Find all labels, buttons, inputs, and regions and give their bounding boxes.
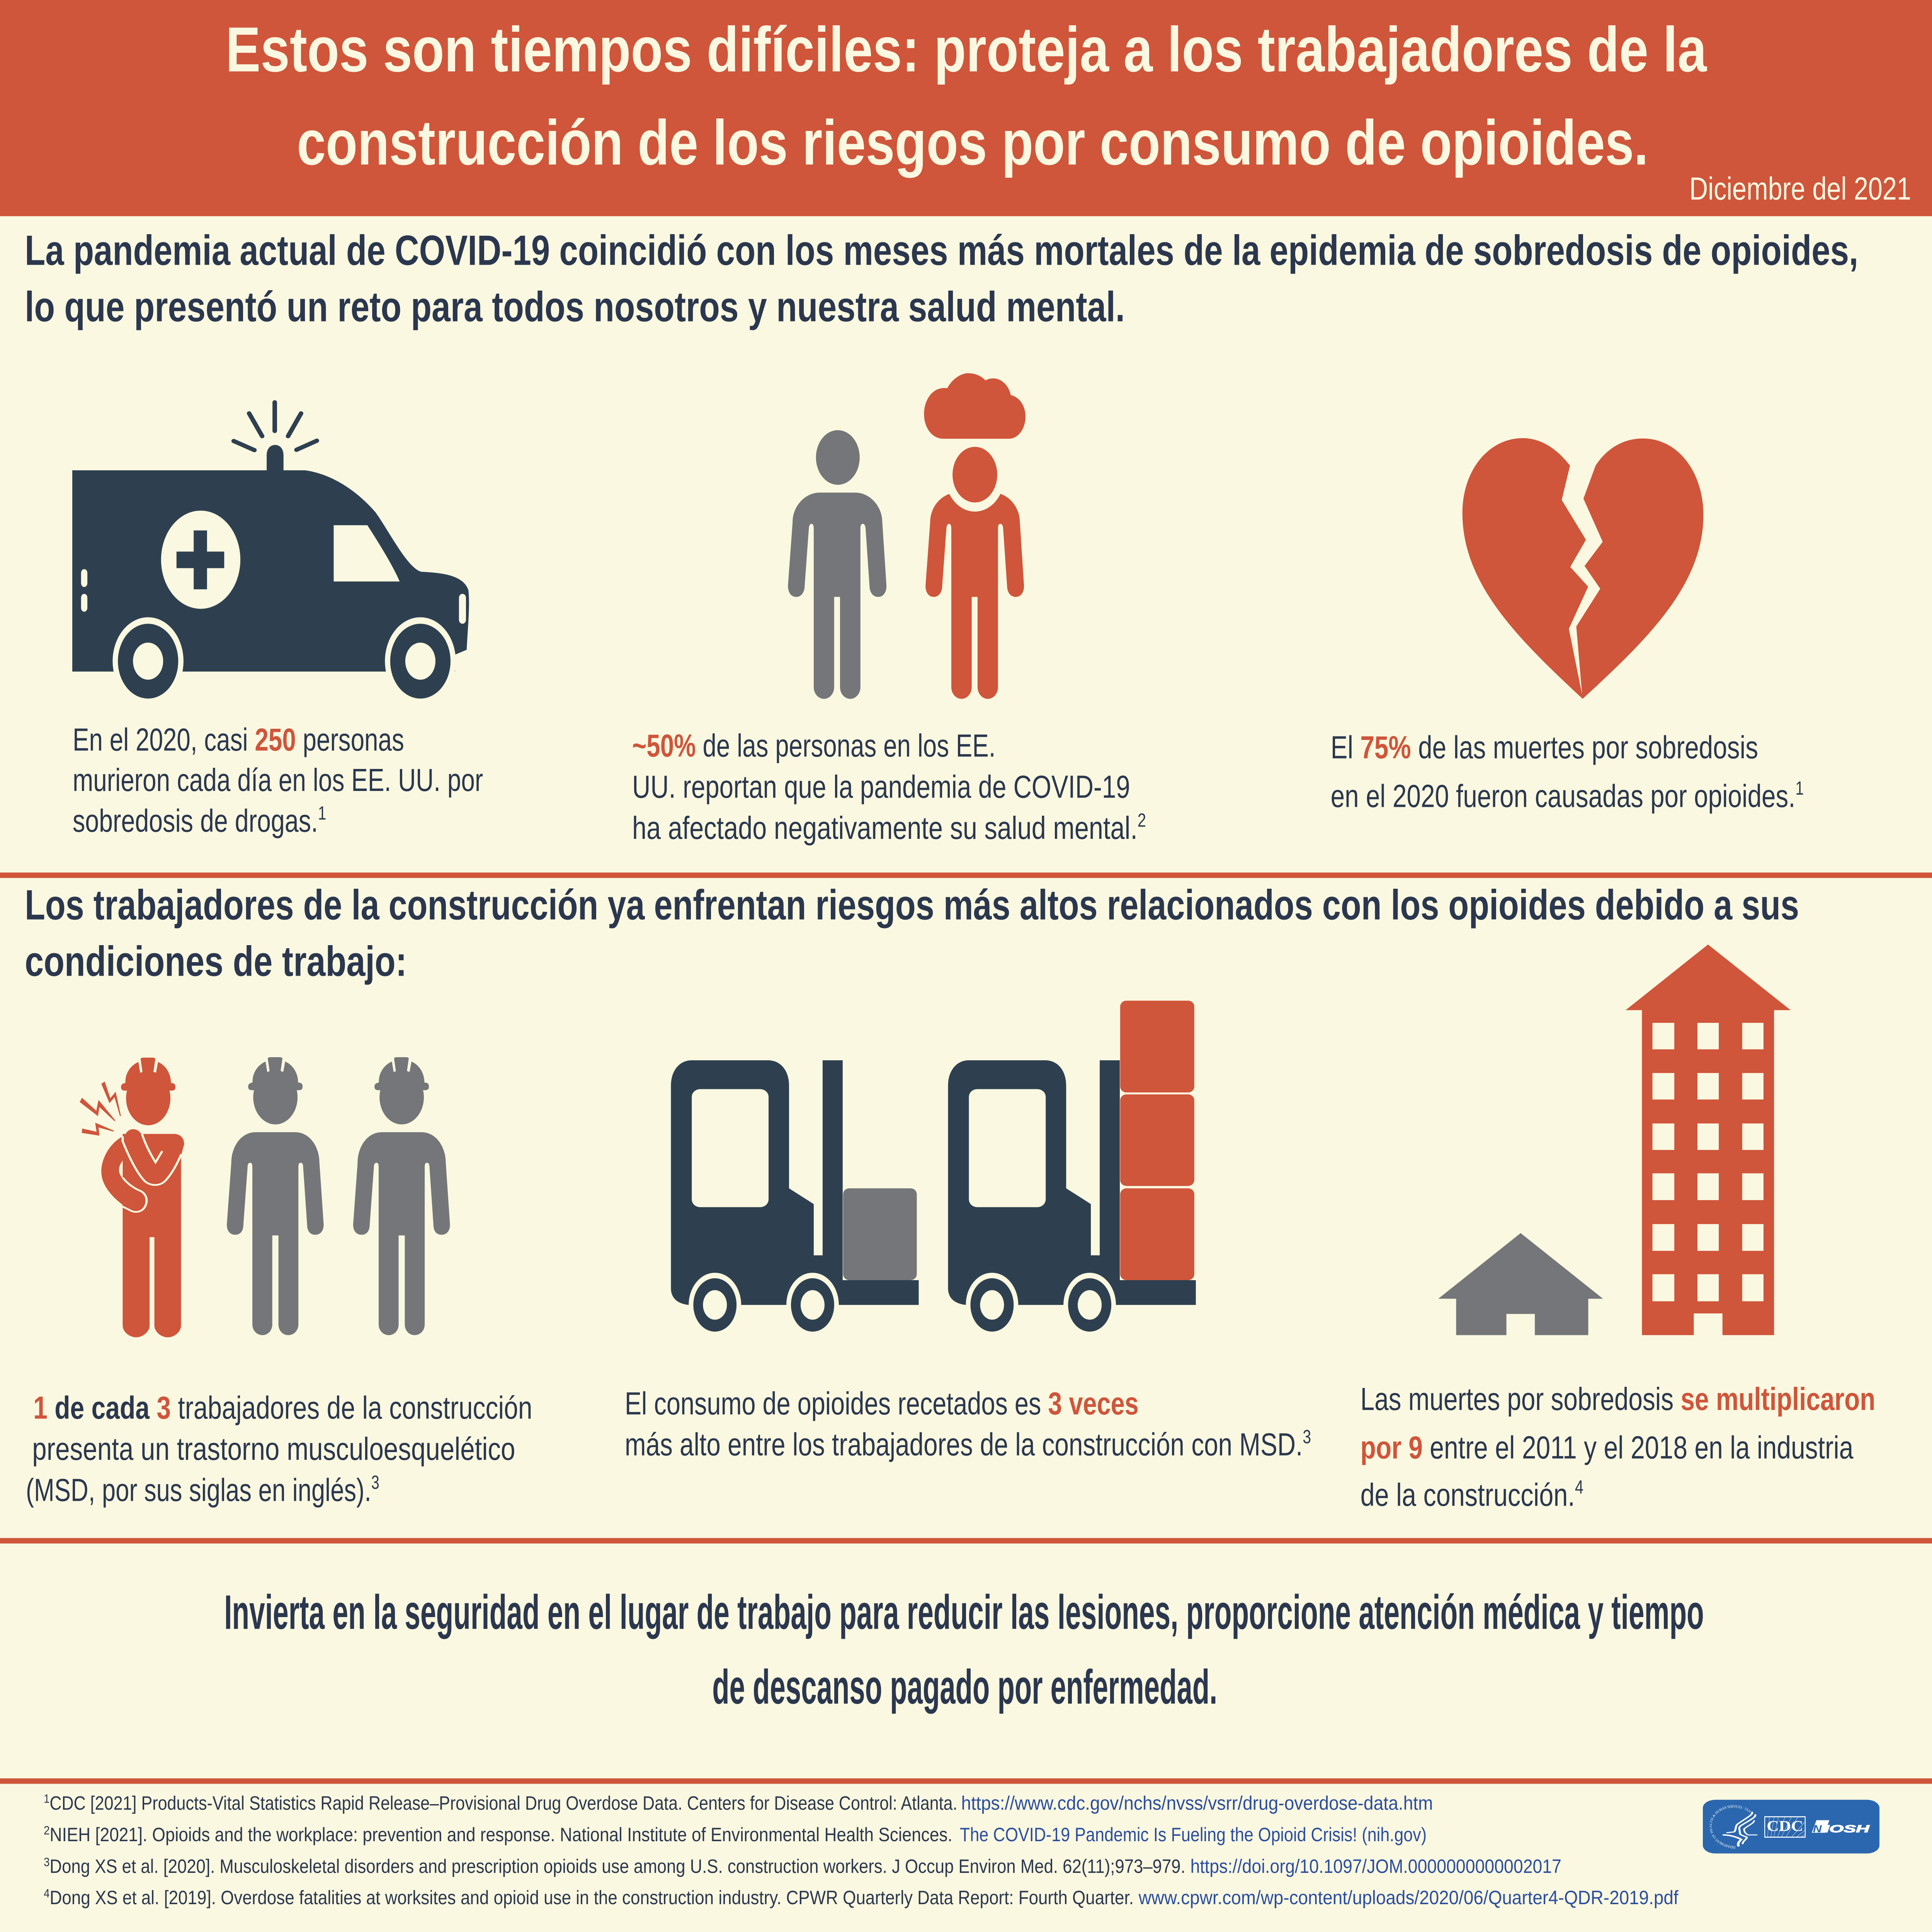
text: 250 deaths per day: En el 2020, casi 250 personas: [73, 722, 404, 757]
text: 75% of deaths: [1331, 730, 1804, 814]
logo: HHS CDC NIOSH: [1703, 1800, 1879, 1854]
footnote 1: [44, 1792, 1433, 1814]
icon: grey person: [788, 430, 886, 699]
text: 75% of deaths: 1: [1796, 778, 1804, 799]
text: 3 times higher: [625, 1386, 1311, 1462]
footnote 4: www.cpwr.com/wp-content/uploads/2020/06/Quarter4-QDR-2019.pdf: [1138, 1887, 1679, 1908]
footnote 2: The COVID-19 Pandemic Is Fueling the Opioid Crisis! (nih.gov): [960, 1824, 1427, 1845]
footnote 3: [44, 1855, 1561, 1877]
icon: forklift with grey box: [671, 1060, 919, 1337]
logo: NIOSH: IOSH: [1824, 1823, 1870, 1835]
icon: ambulance: [72, 402, 469, 705]
text: 250 deaths per day: murieron cada día en los EE. UU. por: [73, 762, 483, 798]
callout: invest in safety: de descanso pagado por enfermedad.: [712, 1660, 1217, 1714]
text: multiplied by 9: por 9 entre el 2011 y el 2018 en la industria: [1361, 1430, 1854, 1465]
heading: pandemic: [25, 226, 1858, 330]
heading: construction workers: condiciones de trabajo:: [25, 938, 407, 985]
callout: invest in safety: [224, 1585, 1704, 1714]
title: [226, 14, 1708, 178]
text: multiplied by 9: Las muertes por sobredosis se multiplicaron: [1361, 1381, 1875, 1417]
logo: NIOSH: [1812, 1820, 1870, 1835]
header banner: [0, 0, 1932, 216]
footnote 1: CDC [2021] Products-Vital Statistics Rapid Release–Provisional Drug Overdose Data. Centers for Disease Control: Atlanta.: [49, 1792, 957, 1814]
text: 50% mental health: 2: [1138, 810, 1146, 831]
footnote 3: https://doi.org/10.1097/JOM.0000000000002017: [1190, 1855, 1561, 1877]
logo: CDC: CDC: [1767, 1818, 1803, 1835]
icon: red building: [1626, 944, 1791, 1335]
icon: forklifts: [671, 1001, 1196, 1337]
text: 1 in 3 workers: 3: [371, 1472, 379, 1493]
footnote 4: Dong XS et al. [2019]. Overdose fatalities at worksites and opioid use in the construction industry. CPWR Quarterly Data Report: Fourth Quarter.: [50, 1887, 1134, 1908]
footnote 4: 4: [44, 1887, 50, 1900]
logo: CDC: [1765, 1817, 1805, 1837]
heading: construction workers: Los trabajadores de la construcción ya enfrentan riesgos más altos relacionados con los opioides debido a sus: [25, 881, 1799, 929]
text: 250 deaths per day: [73, 722, 483, 838]
text: 3 times higher: El consumo de opioides recetados es 3 veces: [625, 1386, 1139, 1421]
text: multiplied by 9: 4: [1575, 1476, 1583, 1498]
heading: construction workers: [25, 881, 1799, 985]
footnote 1: https://www.cdc.gov/nchs/nvss/vsrr/drug-overdose-data.htm: [961, 1792, 1433, 1814]
footnote 1: 1: [44, 1792, 49, 1806]
text: 3 times higher: más alto entre los trabajadores de la construcción con MSD.: [625, 1427, 1316, 1462]
heading: pandemic: La pandemia actual de COVID-19 coincidió con los meses más mortales de la epidemia de sobredosis de opioides,: [25, 226, 1858, 274]
text: 50% mental health: ha afectado negativamente su salud mental.: [632, 810, 1139, 846]
icon: red person with cloud: [924, 373, 1026, 699]
footnote 3: Dong XS et al. [2020]. Musculoskeletal disorders and prescription opioids use among U.S. construction workers. J Occup Environ Med. 62(11);973–979.: [50, 1855, 1185, 1877]
footnote 2: 2: [44, 1824, 50, 1837]
heading: pandemic: lo que presentó un reto para todos nosotros y nuestra salud mental.: [25, 283, 1125, 330]
text: 50% mental health: UU. reportan que la pandemia de COVID-19: [632, 769, 1130, 804]
text: 75% of deaths: El 75% de las muertes por sobredosis: [1331, 730, 1758, 765]
icon: three workers: [80, 1057, 450, 1337]
text: 250 deaths per day: 1: [318, 803, 326, 824]
footnote 3: 3: [44, 1855, 50, 1869]
icon: grey worker: [353, 1057, 450, 1335]
icon: injured red worker: [80, 1058, 184, 1337]
text: 50% mental health: ~50% de las personas en los EE.: [632, 728, 996, 764]
footnote 2: NIEH [2021]. Opioids and the workplace: prevention and response. National Institute of Environmental Health Sciences.: [50, 1824, 952, 1845]
text: 50% mental health: [632, 728, 1146, 846]
footnote 4: [44, 1887, 1679, 1908]
icon: broken heart: [1463, 438, 1703, 699]
footnote 2: [44, 1824, 1427, 1845]
icon: forklift with red boxes: [948, 1001, 1196, 1337]
icon: two people with cloud: [788, 373, 1026, 699]
logo: HHS seal: DEPARTMENT OF HEALTH & HUMAN SERVICES · USA: [1709, 1804, 1752, 1850]
title: construcción de los riesgos por consumo de opioides.: [297, 107, 1648, 178]
text: 1 in 3 workers: presenta un trastorno musculoesquelético: [32, 1431, 515, 1467]
text: multiplied by 9: de la construcción.: [1361, 1477, 1576, 1512]
text: 1 in 3 workers: (MSD, por sus siglas en inglés).: [26, 1472, 391, 1508]
text: 3 times higher: 3: [1303, 1426, 1311, 1447]
text: multiplied by 9: [1361, 1381, 1875, 1512]
icon: house and tall building: [1438, 944, 1791, 1335]
icon: grey worker: [227, 1057, 324, 1335]
footnotes: [44, 1792, 1679, 1908]
logo: NIOSH: N: [1813, 1823, 1822, 1835]
date: Diciembre del 2021: [1689, 171, 1911, 206]
icon: grey house: [1438, 1233, 1603, 1335]
text: 250 deaths per day: sobredosis de drogas.: [73, 803, 327, 838]
text: 1 in 3 workers: [26, 1390, 532, 1508]
text: 1 in 3 workers: 1 de cada 3 trabajadores de la construcción: [33, 1390, 532, 1425]
title: Estos son tiempos difíciles: proteja a los trabajadores de la: [226, 14, 1708, 85]
text: 75% of deaths: en el 2020 fueron causadas por opioides.: [1331, 778, 1805, 814]
